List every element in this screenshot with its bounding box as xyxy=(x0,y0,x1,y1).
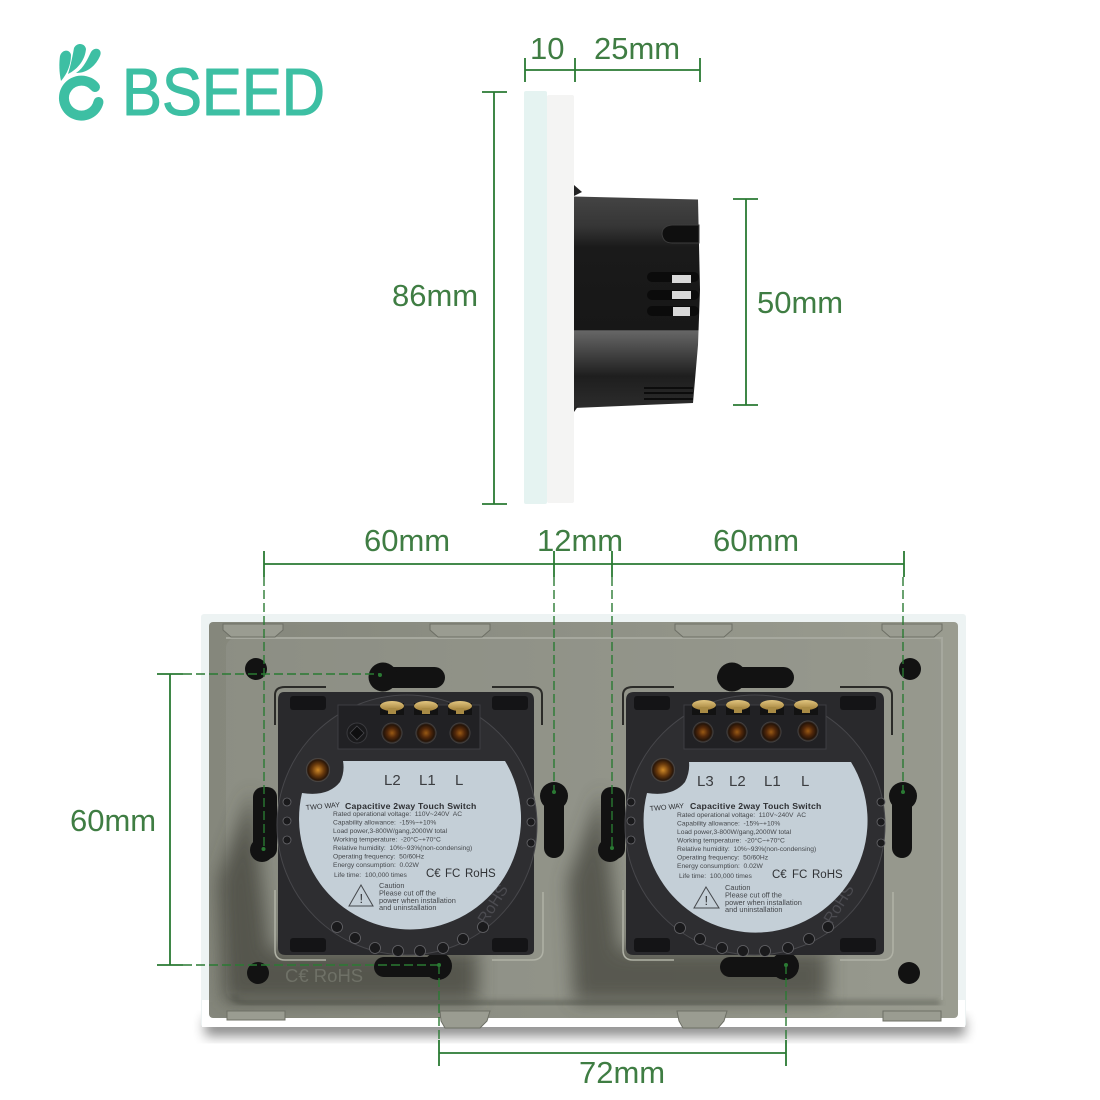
white spec label: Please cut off the xyxy=(725,890,782,900)
dimension: 50mm: 50mm xyxy=(757,285,843,320)
dimension: 12mm: 12mm xyxy=(537,523,623,558)
white spec label: L3 xyxy=(697,773,714,790)
logo: BSEED xyxy=(59,44,325,130)
module recess corners xyxy=(623,687,892,735)
white spec label: Load power,3-800W/gang,2000W total xyxy=(333,828,448,835)
white spec label: Caution xyxy=(379,881,404,890)
glass panel side xyxy=(524,91,547,504)
white spec label: Rated operational voltage: 110V~240V AC xyxy=(677,812,806,819)
white spec label: Working temperature: -20°C~+70°C xyxy=(333,836,441,844)
ring notches xyxy=(627,798,885,956)
white spec label: C€ xyxy=(772,869,787,881)
terminal block xyxy=(684,705,826,749)
white spec label: and uninstallation xyxy=(725,905,783,914)
indicator screw hole xyxy=(651,758,675,782)
white spec label: Operating frequency: 50/60Hz xyxy=(677,854,769,862)
white spec label: TWO WAY xyxy=(305,800,341,812)
white spec label: FC xyxy=(445,868,460,880)
dimension: 25mm: 25mm xyxy=(594,31,680,66)
white spec label: Life time: 100,000 times xyxy=(334,872,408,879)
white spec label: L1 xyxy=(419,772,436,789)
black switch body xyxy=(574,185,700,412)
dimension: 60mm vertical: 60mm xyxy=(70,803,156,838)
dimension: 10 xyxy=(525,31,575,82)
dimension: 60mm left hole spacing: 60mm xyxy=(364,523,450,558)
switch module: right xyxy=(623,687,893,960)
dimension: 60mm right hole spacing: 60mm xyxy=(713,523,799,558)
dial ring xyxy=(277,695,537,955)
top and bottom clips xyxy=(223,624,942,1028)
white spec label: Capability allowance: -15%~+10% xyxy=(333,820,436,826)
white spec label: ! xyxy=(360,891,363,906)
white spec label: RoHS xyxy=(812,869,843,881)
module housing xyxy=(278,692,534,955)
white spec label: Relative humidity: 10%~93%(non-condensing) xyxy=(333,845,472,852)
white spec label: C€ xyxy=(426,868,441,880)
white spec label: L xyxy=(455,772,463,789)
white spec label: Energy consumption: 0.02W xyxy=(677,863,764,870)
side view of switch xyxy=(524,91,700,504)
module housing xyxy=(626,692,884,955)
white spec label: L xyxy=(801,773,809,790)
dimension: 72mm xyxy=(439,1040,786,1090)
embossed ring marks: RoHS xyxy=(821,882,858,927)
icon: logo leaf ring xyxy=(59,44,101,116)
white spec label xyxy=(299,761,521,929)
dimension: 72mm: 72mm xyxy=(579,1055,665,1090)
panel drop shadow xyxy=(205,1018,965,1036)
dimension: 25mm xyxy=(575,31,700,82)
terminal block xyxy=(338,705,480,749)
white spec label: Operating frequency: 50/60Hz xyxy=(333,854,425,860)
terminal screws and holes xyxy=(692,700,818,742)
white spec label: Relative humidity: 10%~93%(non-condensing) xyxy=(677,846,816,853)
dimension guide lines xyxy=(183,577,905,1040)
white spec label: Working temperature: -20°C~+70°C xyxy=(677,836,785,844)
mounting holes and slots xyxy=(245,658,921,984)
white spec label: Life time: 100,000 times xyxy=(679,873,753,880)
dimension: 60mm left hole spacing xyxy=(264,523,554,577)
white spec label: RoHS xyxy=(465,868,496,880)
white spec label: Please cut off the xyxy=(379,888,436,898)
white spec label: L2 xyxy=(384,772,401,789)
dimension: 86mm: 86mm xyxy=(392,278,478,313)
white spec label: Caution xyxy=(725,883,750,892)
white glass outline xyxy=(201,614,966,1027)
white spec label: power when installation xyxy=(725,898,802,907)
white spec label: Load power,3-800W/gang,2000W total xyxy=(677,829,792,836)
white spec label: TWO WAY xyxy=(649,801,685,813)
white spec label: Energy consumption: 0.02W xyxy=(333,862,420,869)
terminal screws and holes xyxy=(347,701,472,744)
dimension: 60mm vertical xyxy=(70,674,183,965)
logo wordmark: BSEED xyxy=(122,55,325,130)
module recess corners xyxy=(275,687,542,725)
white spec label: Rated operational voltage: 110V~240V AC xyxy=(333,811,462,818)
module shadows xyxy=(218,790,478,1002)
white spec label: Capacitive 2way Touch Switch xyxy=(690,801,822,811)
ring notches xyxy=(283,798,535,956)
raised CE RoHS mark: C€ RoHS xyxy=(285,965,363,986)
white spec label: L2 xyxy=(729,773,746,790)
white spec label: ! xyxy=(704,893,708,908)
dimension: 60mm right hole spacing xyxy=(612,523,904,577)
white spec label: Capacitive 2way Touch Switch xyxy=(345,801,477,811)
dimension: 86mm xyxy=(392,92,507,504)
indicator screw hole xyxy=(306,758,330,782)
white spec label: and uninstallation xyxy=(379,903,437,912)
back view of double switch xyxy=(201,614,966,1036)
white spec label: Capability allowance: -15%~+10% xyxy=(677,820,780,828)
switch module: left xyxy=(275,687,543,960)
white spec label xyxy=(644,762,868,933)
grey back plate xyxy=(209,622,958,1028)
dimension: 12mm xyxy=(537,523,623,577)
dimension: 10: 10 xyxy=(530,31,564,66)
dimension: 50mm xyxy=(733,199,843,405)
white spec label: FC xyxy=(792,869,807,881)
white spec label: power when installation xyxy=(379,896,456,905)
dial ring xyxy=(625,695,885,955)
white spec label: L1 xyxy=(764,773,781,790)
white frame side xyxy=(547,95,574,503)
embossed ring marks: RoHS xyxy=(475,882,512,927)
